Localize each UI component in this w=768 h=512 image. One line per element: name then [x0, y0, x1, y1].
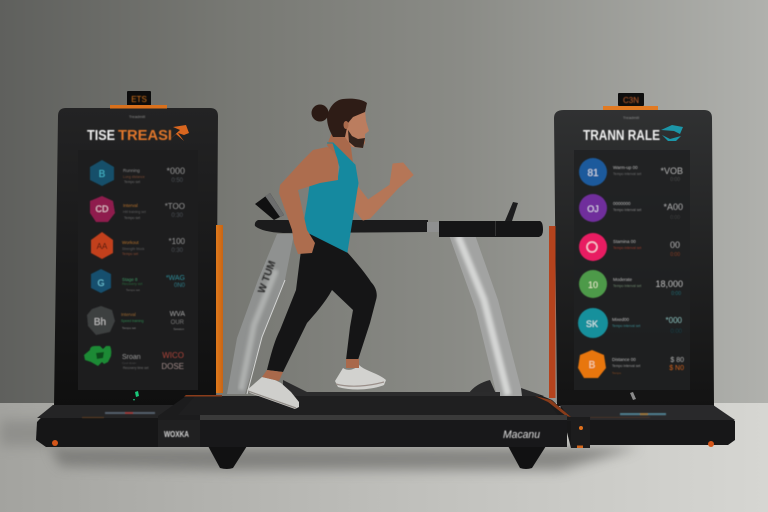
row 3: Stamina 00 — [613, 239, 636, 244]
row 5: SK — [586, 319, 598, 329]
row 5: Session — [173, 327, 184, 331]
right board small caption: Treadmill — [623, 115, 639, 120]
row 1: 81 — [587, 168, 599, 179]
row 6: Cool down — [122, 361, 137, 365]
row 5: Speed training — [121, 319, 144, 323]
left top display: ETS — [131, 95, 147, 104]
row 1: Running — [123, 168, 140, 173]
runner — [247, 99, 413, 409]
right base indicator lights — [590, 413, 666, 418]
left board title — [87, 127, 172, 144]
row 2: *A00 — [663, 202, 683, 212]
row 4: 18,000 — [655, 279, 683, 289]
tank top — [303, 143, 358, 252]
row 1: Warm-up 00 — [613, 165, 638, 170]
row 6 — [578, 350, 684, 378]
left board small caption: Treadmill — [129, 114, 145, 119]
wall background — [0, 0, 768, 403]
row 5: *000 — [666, 316, 683, 325]
treadmill deck — [158, 395, 571, 447]
right board inner column — [574, 150, 690, 390]
row 3: AA — [97, 242, 108, 251]
rear deck plate — [283, 380, 500, 397]
right board title: TRANN RALE — [583, 127, 660, 144]
row 4: 0N0 — [174, 283, 186, 289]
row 4: Recovery set — [122, 282, 142, 286]
deck front — [200, 420, 567, 447]
right orange strip — [549, 226, 556, 398]
head — [345, 110, 369, 148]
row 1: B — [99, 169, 106, 180]
row 3 — [579, 233, 680, 261]
left board inner column — [78, 150, 198, 390]
row 2: 0000000 — [613, 201, 631, 206]
icon: teal swoosh logo — [661, 125, 683, 141]
icon: orange swoosh logo — [168, 125, 189, 141]
row 5: Bh — [94, 317, 106, 328]
row 2: CD — [96, 204, 109, 214]
left board title: TISE — [87, 127, 115, 144]
row 4: 0:00 — [671, 291, 681, 297]
rear ankle — [262, 370, 283, 381]
panel: left display board — [54, 91, 218, 406]
row 6 — [84, 346, 184, 371]
row 1: 0:00 — [670, 177, 680, 183]
row 2: Hill training set — [123, 210, 146, 214]
left top display — [127, 91, 151, 106]
row 1: Long distance — [123, 175, 145, 179]
row 3: *100 — [169, 237, 186, 246]
console wedge — [255, 193, 284, 220]
icon: right board grey mark — [630, 392, 636, 400]
right base unit — [560, 405, 735, 448]
row 5: WVA — [170, 311, 185, 318]
row 5: Mixed00 — [612, 317, 630, 322]
row 6: DOSE — [161, 362, 184, 371]
ear — [344, 121, 348, 129]
row 4: Moderate — [613, 277, 633, 282]
row 5 — [87, 306, 185, 335]
near arm — [279, 147, 338, 254]
left base orange foot — [52, 440, 58, 446]
row 3: Workout — [122, 240, 139, 245]
row 2 — [90, 196, 185, 222]
treadmill feet — [208, 446, 546, 469]
row 2: Tempo interval set — [613, 208, 641, 212]
handrail grip — [439, 221, 543, 237]
left base unit — [36, 405, 190, 447]
treadmill right post — [449, 235, 544, 396]
row 4: G — [97, 278, 105, 288]
right top display — [618, 93, 644, 106]
left base indicator lights — [82, 412, 155, 418]
row 1: Tempo set — [124, 180, 140, 184]
right base orange studs — [577, 426, 583, 448]
row 1 — [579, 158, 683, 186]
front ankle — [346, 359, 359, 368]
row 4 — [579, 270, 683, 298]
row 2: Tempo set — [124, 216, 140, 220]
post brand lettering: W TUM — [256, 259, 278, 295]
handrail bar — [255, 220, 428, 233]
row 5: 0:00 — [670, 329, 683, 335]
panel: right display board — [554, 93, 714, 406]
left board title: TREASI — [118, 127, 172, 144]
rear shoe — [247, 377, 299, 409]
rear shoe sole — [248, 391, 296, 408]
deck side fills — [158, 395, 571, 421]
front left badge — [158, 420, 200, 447]
right orange top bar — [603, 106, 658, 110]
row 2: Interval — [123, 203, 138, 208]
row 4: 10 — [588, 280, 598, 290]
row 6: $ 80 — [670, 357, 684, 364]
deck lip — [200, 415, 567, 421]
floor shadow on left — [0, 420, 60, 446]
row 4: *WAG — [166, 275, 185, 282]
left orange strip — [216, 225, 223, 393]
floor — [0, 403, 768, 512]
right post base wedges — [467, 380, 544, 396]
row 6: Tempo interval set — [612, 364, 640, 368]
row 2: OJ — [587, 204, 599, 214]
row 5: Interval — [121, 312, 136, 317]
row 6: Distance 00 — [612, 357, 636, 362]
row 2: 0:30 — [171, 213, 184, 219]
row 2: *TOO — [165, 202, 185, 211]
front left badge: WOXKA — [164, 430, 189, 439]
handrail and console — [255, 193, 543, 237]
row 5: Tempo set — [122, 326, 136, 330]
row 1 — [90, 160, 185, 186]
row 3: Strength block — [122, 247, 145, 251]
row 3: 00 — [670, 240, 680, 250]
orange deck edges — [184, 395, 571, 417]
row 3: 0:00 — [670, 252, 680, 258]
neck — [327, 130, 353, 167]
leggings — [267, 230, 377, 372]
row 6: WICO — [162, 351, 184, 360]
row 3 — [91, 232, 186, 259]
row 3: Tempo set — [122, 252, 138, 256]
front right brand: Macanu — [503, 429, 540, 441]
icon: left board green mark — [133, 391, 139, 401]
right base corner block — [571, 417, 590, 448]
row 3: Tempo interval set — [613, 246, 641, 250]
row 6: $ N0 — [669, 365, 684, 372]
row 6: Tempo — [612, 371, 621, 375]
hair bun — [312, 104, 328, 122]
row 4: Tempo set — [126, 288, 140, 292]
row 6: B — [589, 360, 596, 371]
front shoe — [335, 365, 386, 389]
treadmill left post — [227, 234, 294, 394]
row 5: OUR — [171, 320, 185, 326]
belt surface — [178, 396, 558, 415]
row 4: Tempo interval set — [613, 284, 641, 288]
row 6: Sroan — [122, 354, 141, 361]
hair — [327, 99, 367, 137]
left orange top bar — [110, 105, 167, 108]
row 2: 0:00 — [670, 215, 680, 221]
row 1: 0:50 — [171, 178, 184, 184]
right board body — [554, 110, 714, 406]
right top display: C3N — [623, 96, 639, 105]
row 3: 0:30 — [171, 248, 184, 254]
row 1: Tempo interval set — [613, 172, 641, 176]
front shoe sole — [336, 382, 384, 386]
far arm — [355, 163, 413, 220]
row 2 — [579, 194, 683, 222]
floor shadow under treadmill — [50, 447, 640, 470]
row 1: *VOB — [660, 166, 683, 176]
small stick — [505, 202, 518, 221]
right base orange foot — [708, 441, 714, 447]
left board body — [54, 108, 218, 406]
row 4: Stage 8 — [122, 277, 138, 282]
beard — [348, 130, 365, 148]
row 5: Tempo interval set — [612, 324, 640, 328]
row 1: *000 — [166, 166, 185, 176]
rail silver collar — [427, 222, 439, 232]
row 6: Recovery time set — [123, 366, 149, 370]
row 4 — [91, 269, 186, 293]
row 5 — [578, 308, 683, 338]
